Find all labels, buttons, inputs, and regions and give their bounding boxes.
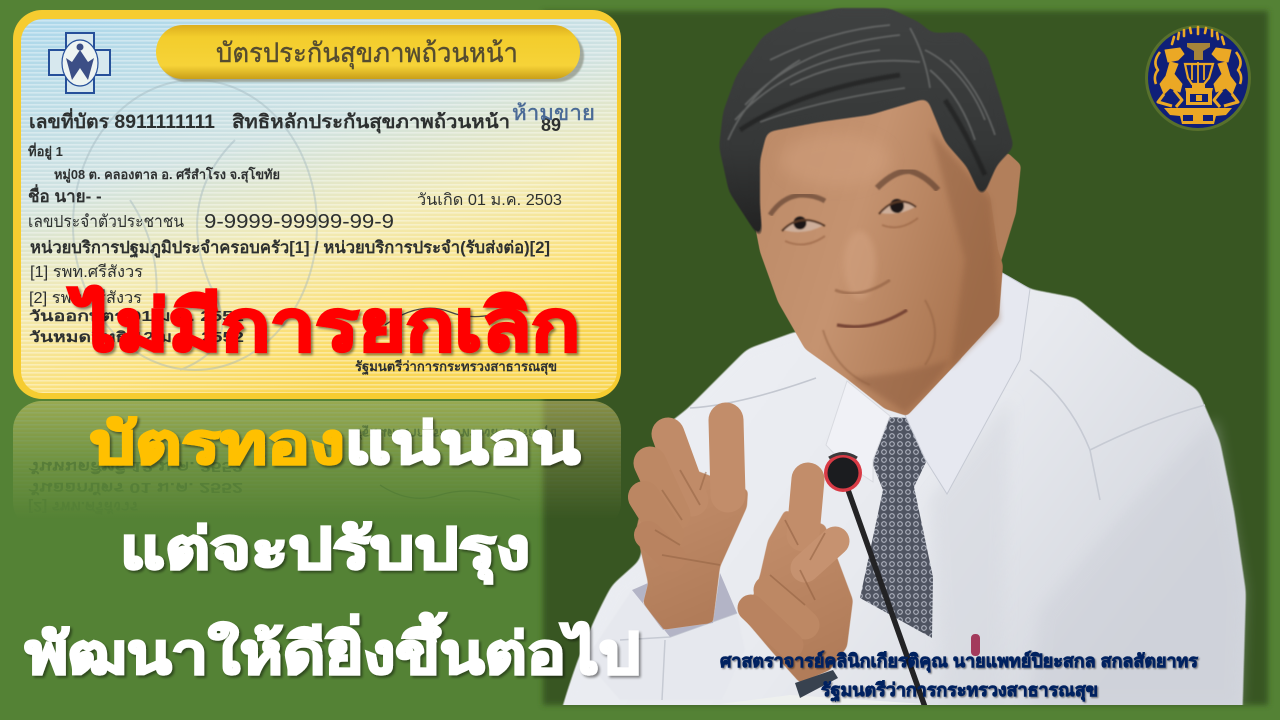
card details text: 9-9999-99999-99-9: [204, 211, 394, 233]
card details text: เลขที่บัตร 8911111111: [29, 108, 215, 133]
watermark: [73, 80, 317, 370]
mirrored card text: วันออกบัตร 01 ม.ค. 2552: [28, 479, 243, 496]
seal urn: [1185, 43, 1213, 88]
card details text: วันหมดสิทธิ 12 ม.ค. 2552: [29, 329, 244, 346]
headline: gold card for sure: บัตรทอง แน่นอน: [90, 412, 580, 475]
card details text: ที่อยู่ 1: [28, 142, 63, 160]
right eye: [879, 199, 918, 227]
card emblem: [49, 33, 110, 93]
mirrored card text: รัฐมนตรีว่าการกระทรวงสาธารณสุข: [355, 424, 557, 441]
dark green panel: [543, 11, 1268, 705]
seal base: [1164, 88, 1232, 124]
card details text: ห้ามขาย: [512, 102, 595, 125]
card details text: [2] รพท.ศรีสังวร: [29, 289, 142, 307]
card details text: [28, 102, 595, 376]
headline: but will improve: แต่จะปรับปรุง: [120, 517, 530, 584]
gold card image: [13, 10, 621, 399]
right hand: [745, 479, 853, 698]
government seal: [1145, 25, 1251, 131]
portrait of minister: [556, 8, 1246, 720]
card details text: หมู่08 ต. คลองตาล อ. ศรีสำโรง จ.สุโขทัย: [54, 166, 280, 183]
mirrored card text: วันหมดสิทธิ 12 ม.ค. 2552: [28, 458, 243, 476]
nose: [835, 280, 890, 293]
mouth: [837, 310, 907, 327]
card details text: [1] รพท.ศรีสังวร: [30, 263, 143, 281]
minister name and title: รัฐมนตรีว่าการกระทรวงสาธารณสุข: [821, 680, 1098, 702]
tie: [860, 417, 933, 638]
minister name and title: [720, 650, 1198, 702]
card details text: วันออกบัตร 01 ม.ค. 2552: [29, 309, 244, 325]
left eyebrow: [770, 195, 825, 215]
headline: develop further: พัฒนาให้ดียิ่งขึ้นต่อไป: [25, 613, 640, 685]
seal left lion: [1155, 48, 1184, 107]
seal flames: [1172, 27, 1224, 44]
card details text: สิทธิหลักประกันสุขภาพถ้วนหน้า: [232, 111, 510, 134]
mirrored card text: [28, 425, 556, 501]
card details text: รัฐมนตรีว่าการกระทรวงสาธารณสุข: [355, 359, 557, 376]
hair: [719, 8, 1014, 244]
left eye: [782, 216, 825, 245]
face: [750, 90, 1003, 416]
collar: [826, 271, 1030, 494]
right eyebrow: [877, 171, 938, 190]
left hand: [632, 420, 748, 637]
headline: no cancellation: ไม่มีการยกเลิก: [67, 285, 580, 365]
microphone: [824, 454, 925, 707]
card details text: เลขประจำตัวประชาชน: [28, 212, 184, 231]
card details text: หน่วยบริการปฐมภูมิประจำครอบครัว[1] / หน่วยบริการประจำ(รับส่งต่อ)[2]: [30, 238, 550, 259]
shirt: [556, 271, 1246, 720]
card title pill: [156, 25, 584, 82]
card title pill: บัตรประกันสุขภาพถ้วนหน้า: [216, 38, 518, 70]
pen in pocket: [971, 634, 980, 656]
mirrored card text: [2] รพท.ศรีสังวร: [28, 498, 139, 515]
card details text: 89: [541, 115, 561, 135]
seal right lion: [1212, 48, 1241, 107]
ear: [985, 152, 1021, 268]
minister name and title: ศาสตราจารย์คลินิกเกียรติคุณ นายแพทย์ปิยะสกล สกลสัตยาทร: [720, 650, 1198, 673]
card reflection: [13, 401, 621, 505]
card details text: ชื่อ นาย- -: [28, 184, 102, 206]
card details text: วันเกิด 01 ม.ค. 2503: [417, 192, 562, 209]
